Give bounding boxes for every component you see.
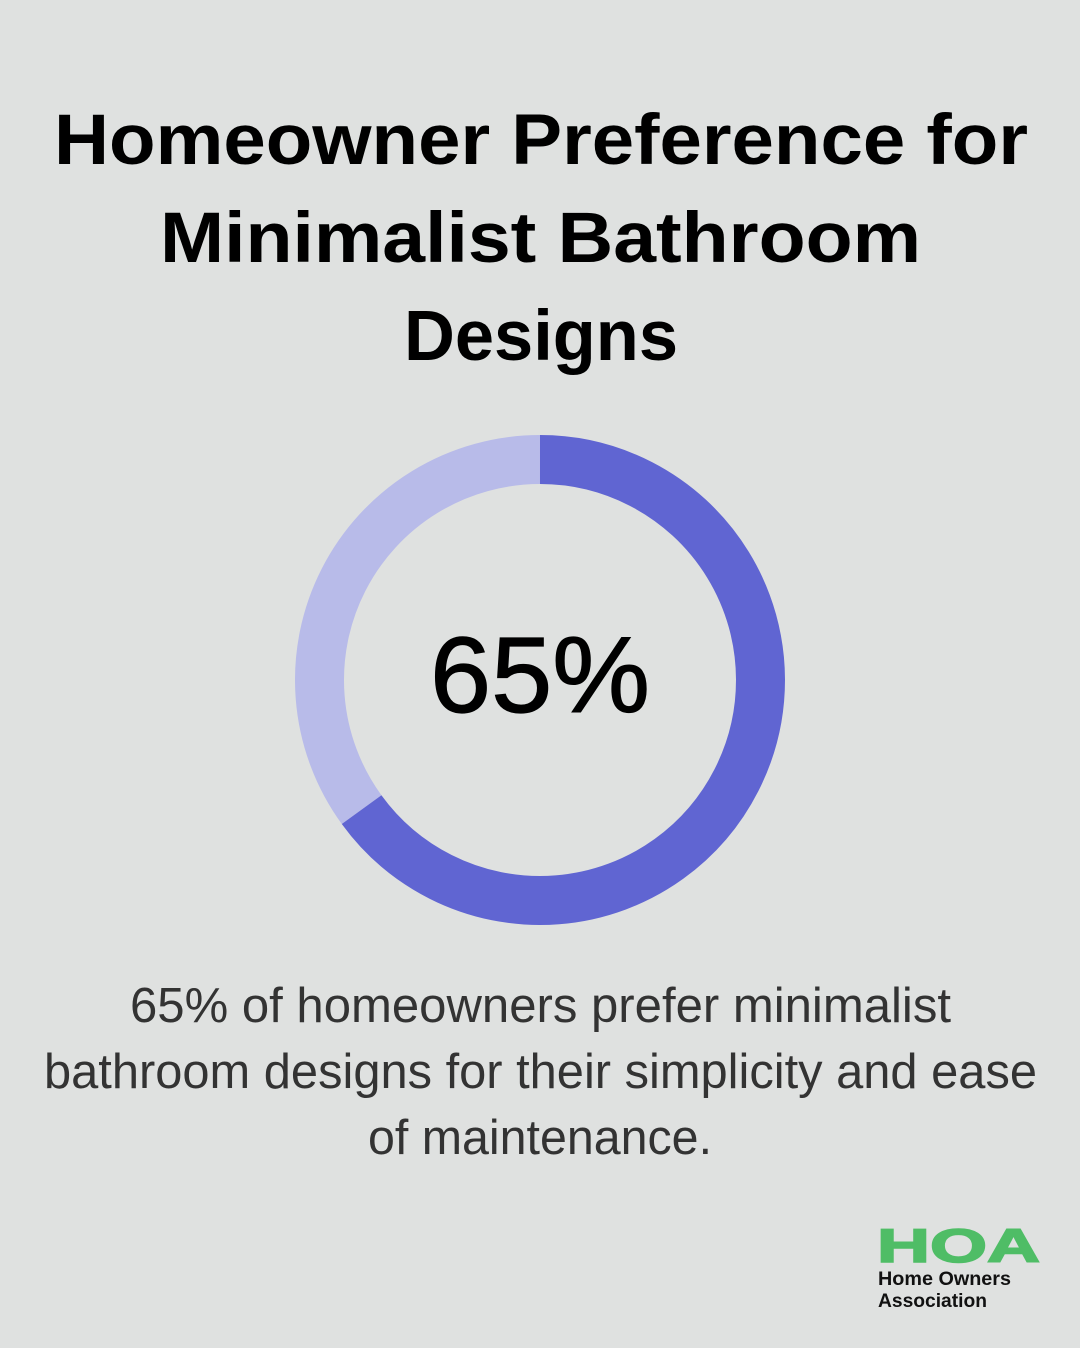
donut chart: [319, 460, 760, 900]
logo name: Home Owners: [878, 1268, 1011, 1290]
title: Designs: [404, 297, 678, 376]
logo name: Association: [878, 1290, 987, 1312]
donut 65% segment: [362, 460, 760, 900]
logo: HOA: [877, 1219, 1040, 1312]
title: Minimalist Bathroom: [160, 199, 921, 278]
title: [54, 101, 1028, 376]
description text: [44, 979, 1037, 1165]
logo name: [878, 1268, 1011, 1312]
logo mark: HOA: [877, 1219, 1040, 1272]
description text: bathroom designs for their simplicity and ease: [44, 1045, 1037, 1099]
title: Homeowner Preference for: [54, 101, 1028, 180]
description text: of maintenance.: [368, 1111, 712, 1165]
description text: 65% of homeowners prefer minimalist: [130, 979, 951, 1033]
donut remainder segment: [319, 460, 540, 810]
donut value: 65%: [430, 614, 650, 735]
